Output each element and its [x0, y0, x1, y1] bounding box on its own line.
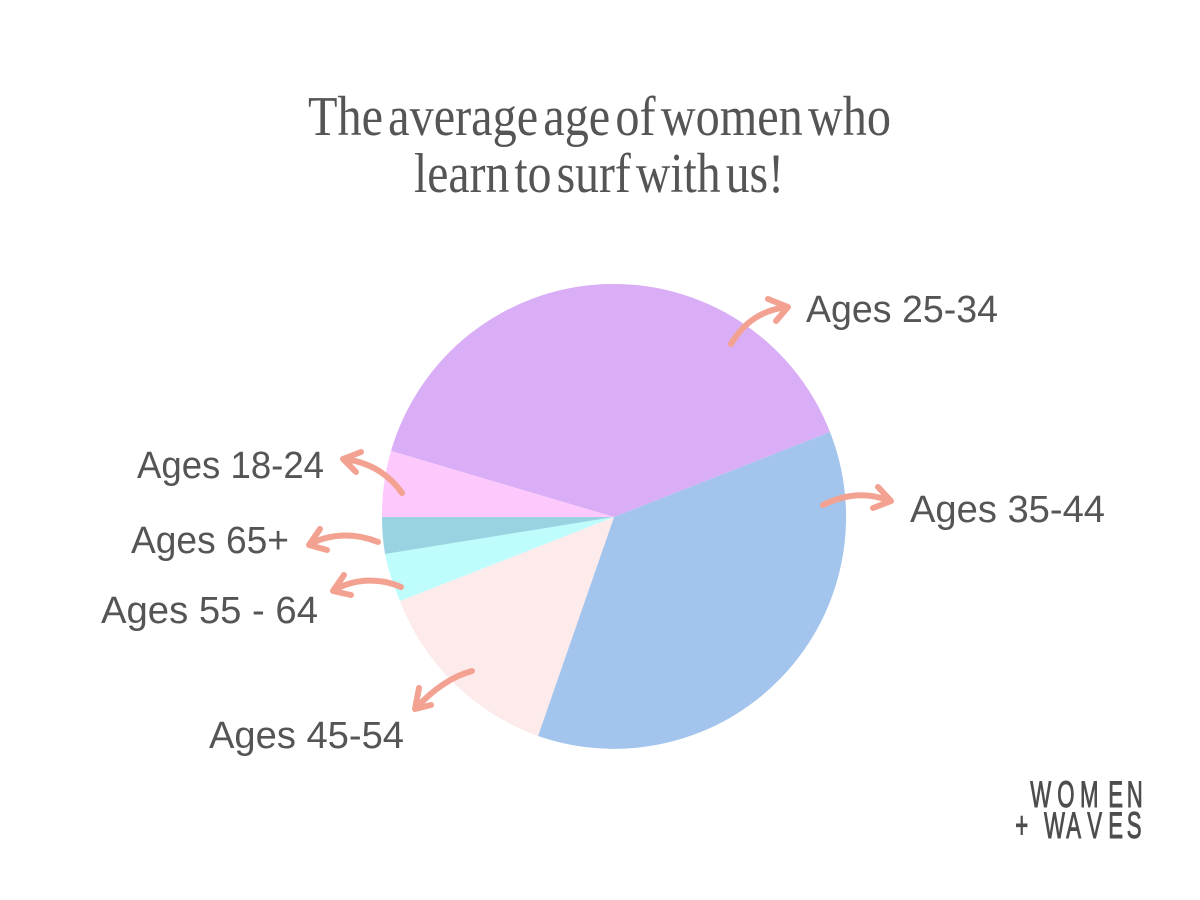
- slice: ages 65+: [382, 517, 614, 554]
- arrow: ages 65+: [309, 529, 378, 550]
- arrow: ages 55-64: [333, 575, 401, 595]
- arrow: ages 18-24: [343, 452, 402, 493]
- arrow: ages 35-44: [823, 487, 891, 508]
- slice: ages 25-34: [391, 284, 830, 517]
- logo: WOMEN: [1030, 774, 1143, 815]
- title: [308, 86, 891, 205]
- label: ages 65+: Ages 65+: [131, 520, 289, 562]
- arrow: ages 25-34: [731, 299, 788, 344]
- logo: [1015, 774, 1143, 846]
- slice: ages 45-54: [400, 517, 614, 736]
- arrow: ages 45-54: [415, 671, 472, 709]
- title: The average age of women who: [308, 86, 891, 148]
- slice: ages 35-44: [538, 432, 846, 749]
- label: ages 35-44: Ages 35-44: [910, 489, 1105, 531]
- label: ages 45-54: Ages 45-54: [209, 715, 404, 757]
- pie chart: [382, 284, 846, 749]
- label: ages 25-34: Ages 25-34: [806, 289, 998, 331]
- title: learn to surf with us!: [414, 143, 784, 205]
- logo: +WAVES: [1015, 805, 1142, 846]
- slice: ages 18-24: [382, 451, 614, 517]
- label: ages 55-64: Ages 55 - 64: [101, 590, 318, 632]
- slice: ages 55-64: [385, 517, 614, 601]
- label: ages 18-24: Ages 18-24: [137, 445, 324, 487]
